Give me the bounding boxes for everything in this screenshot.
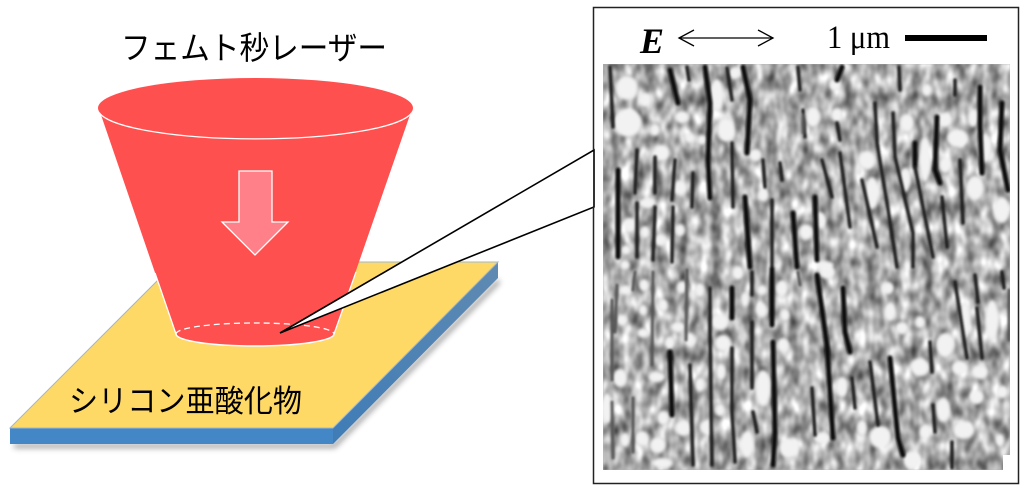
icon: downward arrow — [222, 171, 288, 255]
panel: silicon suboxide substrate — [10, 262, 500, 448]
laser cone — [98, 78, 413, 346]
label: silicon suboxide: シリコン亜酸化物 — [69, 384, 302, 419]
substrate front face — [10, 428, 333, 444]
label: polarization E: E — [639, 21, 664, 61]
SEM micrograph — [601, 64, 1011, 471]
icon: double-headed polarization arrow — [679, 30, 773, 46]
white corner notch — [1003, 455, 1010, 470]
substrate side face — [333, 262, 498, 444]
scale bar — [905, 35, 987, 41]
label: scale 1 micrometre: 1 μm — [827, 20, 890, 56]
heading: femtosecond laser: フェムト秒レーザー — [121, 30, 387, 66]
panel: SEM image frame — [594, 8, 1018, 484]
callout wedge — [280, 150, 594, 333]
substrate top face — [10, 262, 498, 428]
dark grooves — [610, 67, 1009, 468]
bright grains — [601, 67, 1010, 469]
